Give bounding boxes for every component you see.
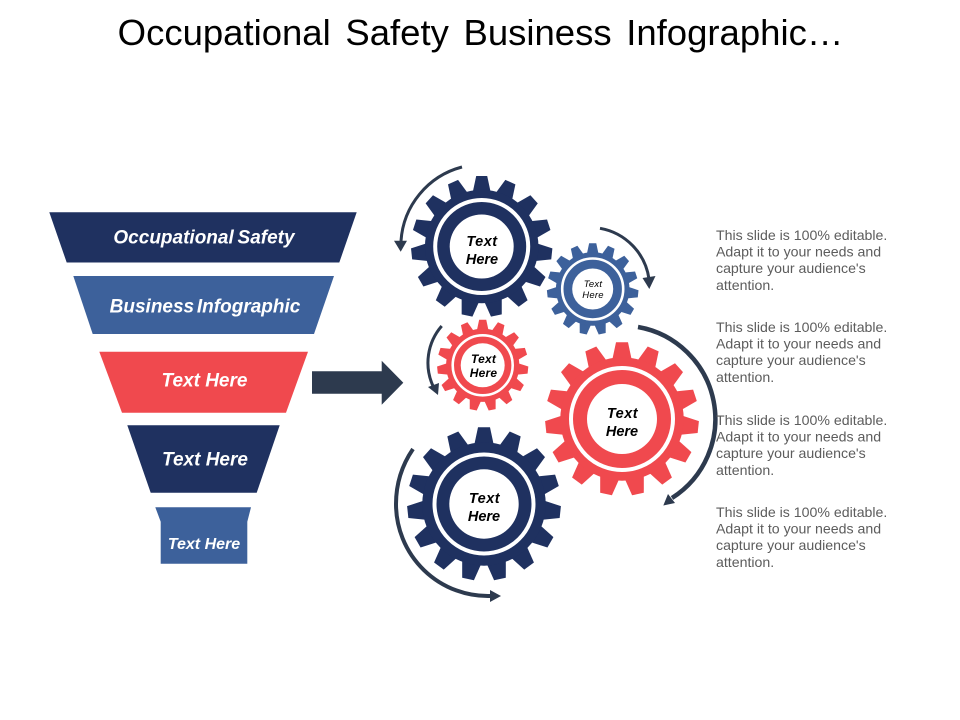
text block 1: Adapt it to your needs and	[716, 244, 881, 260]
gear: small blue: Text	[584, 279, 602, 290]
gear: top navy	[411, 176, 553, 317]
text block 4: capture your audience's	[716, 537, 866, 553]
gear: small blue	[547, 243, 639, 335]
gear: large red: Text	[607, 406, 639, 422]
text block 4: This slide is 100% editable.	[716, 504, 887, 520]
text block 3: capture your audience's	[716, 445, 866, 461]
funnel tier 5: Text Here: Text Here	[168, 536, 240, 553]
text block 4: attention.	[716, 554, 774, 570]
funnel tier 1: Occupational Safety	[49, 212, 357, 262]
gear: small red: Here	[470, 366, 497, 380]
funnel tier 2: Business Infographic	[73, 276, 334, 334]
text block 2: attention.	[716, 369, 774, 385]
gear: bottom navy	[407, 427, 561, 581]
gear: top navy: Text	[466, 234, 498, 250]
funnel tier 2: Business Infographic: Business Infographic	[110, 296, 301, 318]
gear: top navy: Here	[466, 252, 498, 268]
gear: small blue: Here	[582, 290, 604, 301]
title: Occupational Safety Business Infographic…	[118, 12, 843, 53]
arrow: small blue gear rotation	[600, 228, 656, 289]
text block 1: This slide is 100% editable.	[716, 227, 887, 243]
funnel diagram	[49, 212, 357, 564]
text block 3: Adapt it to your needs and	[716, 428, 881, 444]
text block 2: Adapt it to your needs and	[716, 336, 881, 352]
funnel tier 4: Text Here	[127, 425, 280, 493]
gear: bottom navy: Text	[469, 491, 501, 507]
arrow: large red gear rotation	[638, 327, 715, 506]
gear: small red	[437, 320, 529, 411]
gear: large red	[545, 342, 699, 496]
arrow: funnel to gears	[312, 361, 403, 405]
gear: large red: Here	[606, 424, 638, 440]
text block 3: attention.	[716, 462, 774, 478]
funnel tier 3: Text Here: Text Here	[162, 370, 248, 392]
funnel tier 3: Text Here	[99, 352, 308, 413]
text block 1: attention.	[716, 277, 774, 293]
text block 3: This slide is 100% editable.	[716, 412, 887, 428]
arrow: bottom navy gear rotation	[396, 449, 501, 602]
funnel tier 5: Text Here	[155, 507, 251, 564]
funnel tier 1: Occupational Safety: Occupational Safety	[113, 228, 296, 248]
text block 2: This slide is 100% editable.	[716, 319, 887, 335]
text block 2: capture your audience's	[716, 352, 866, 368]
gear: small red: Text	[471, 352, 497, 366]
gear: bottom navy: Here	[468, 509, 500, 525]
funnel tier 4: Text Here: Text Here	[162, 450, 248, 470]
arrow: small red gear rotation	[428, 326, 442, 395]
text block 4: Adapt it to your needs and	[716, 520, 881, 536]
arrow: top navy gear rotation	[394, 167, 462, 252]
text block 1: capture your audience's	[716, 260, 866, 276]
